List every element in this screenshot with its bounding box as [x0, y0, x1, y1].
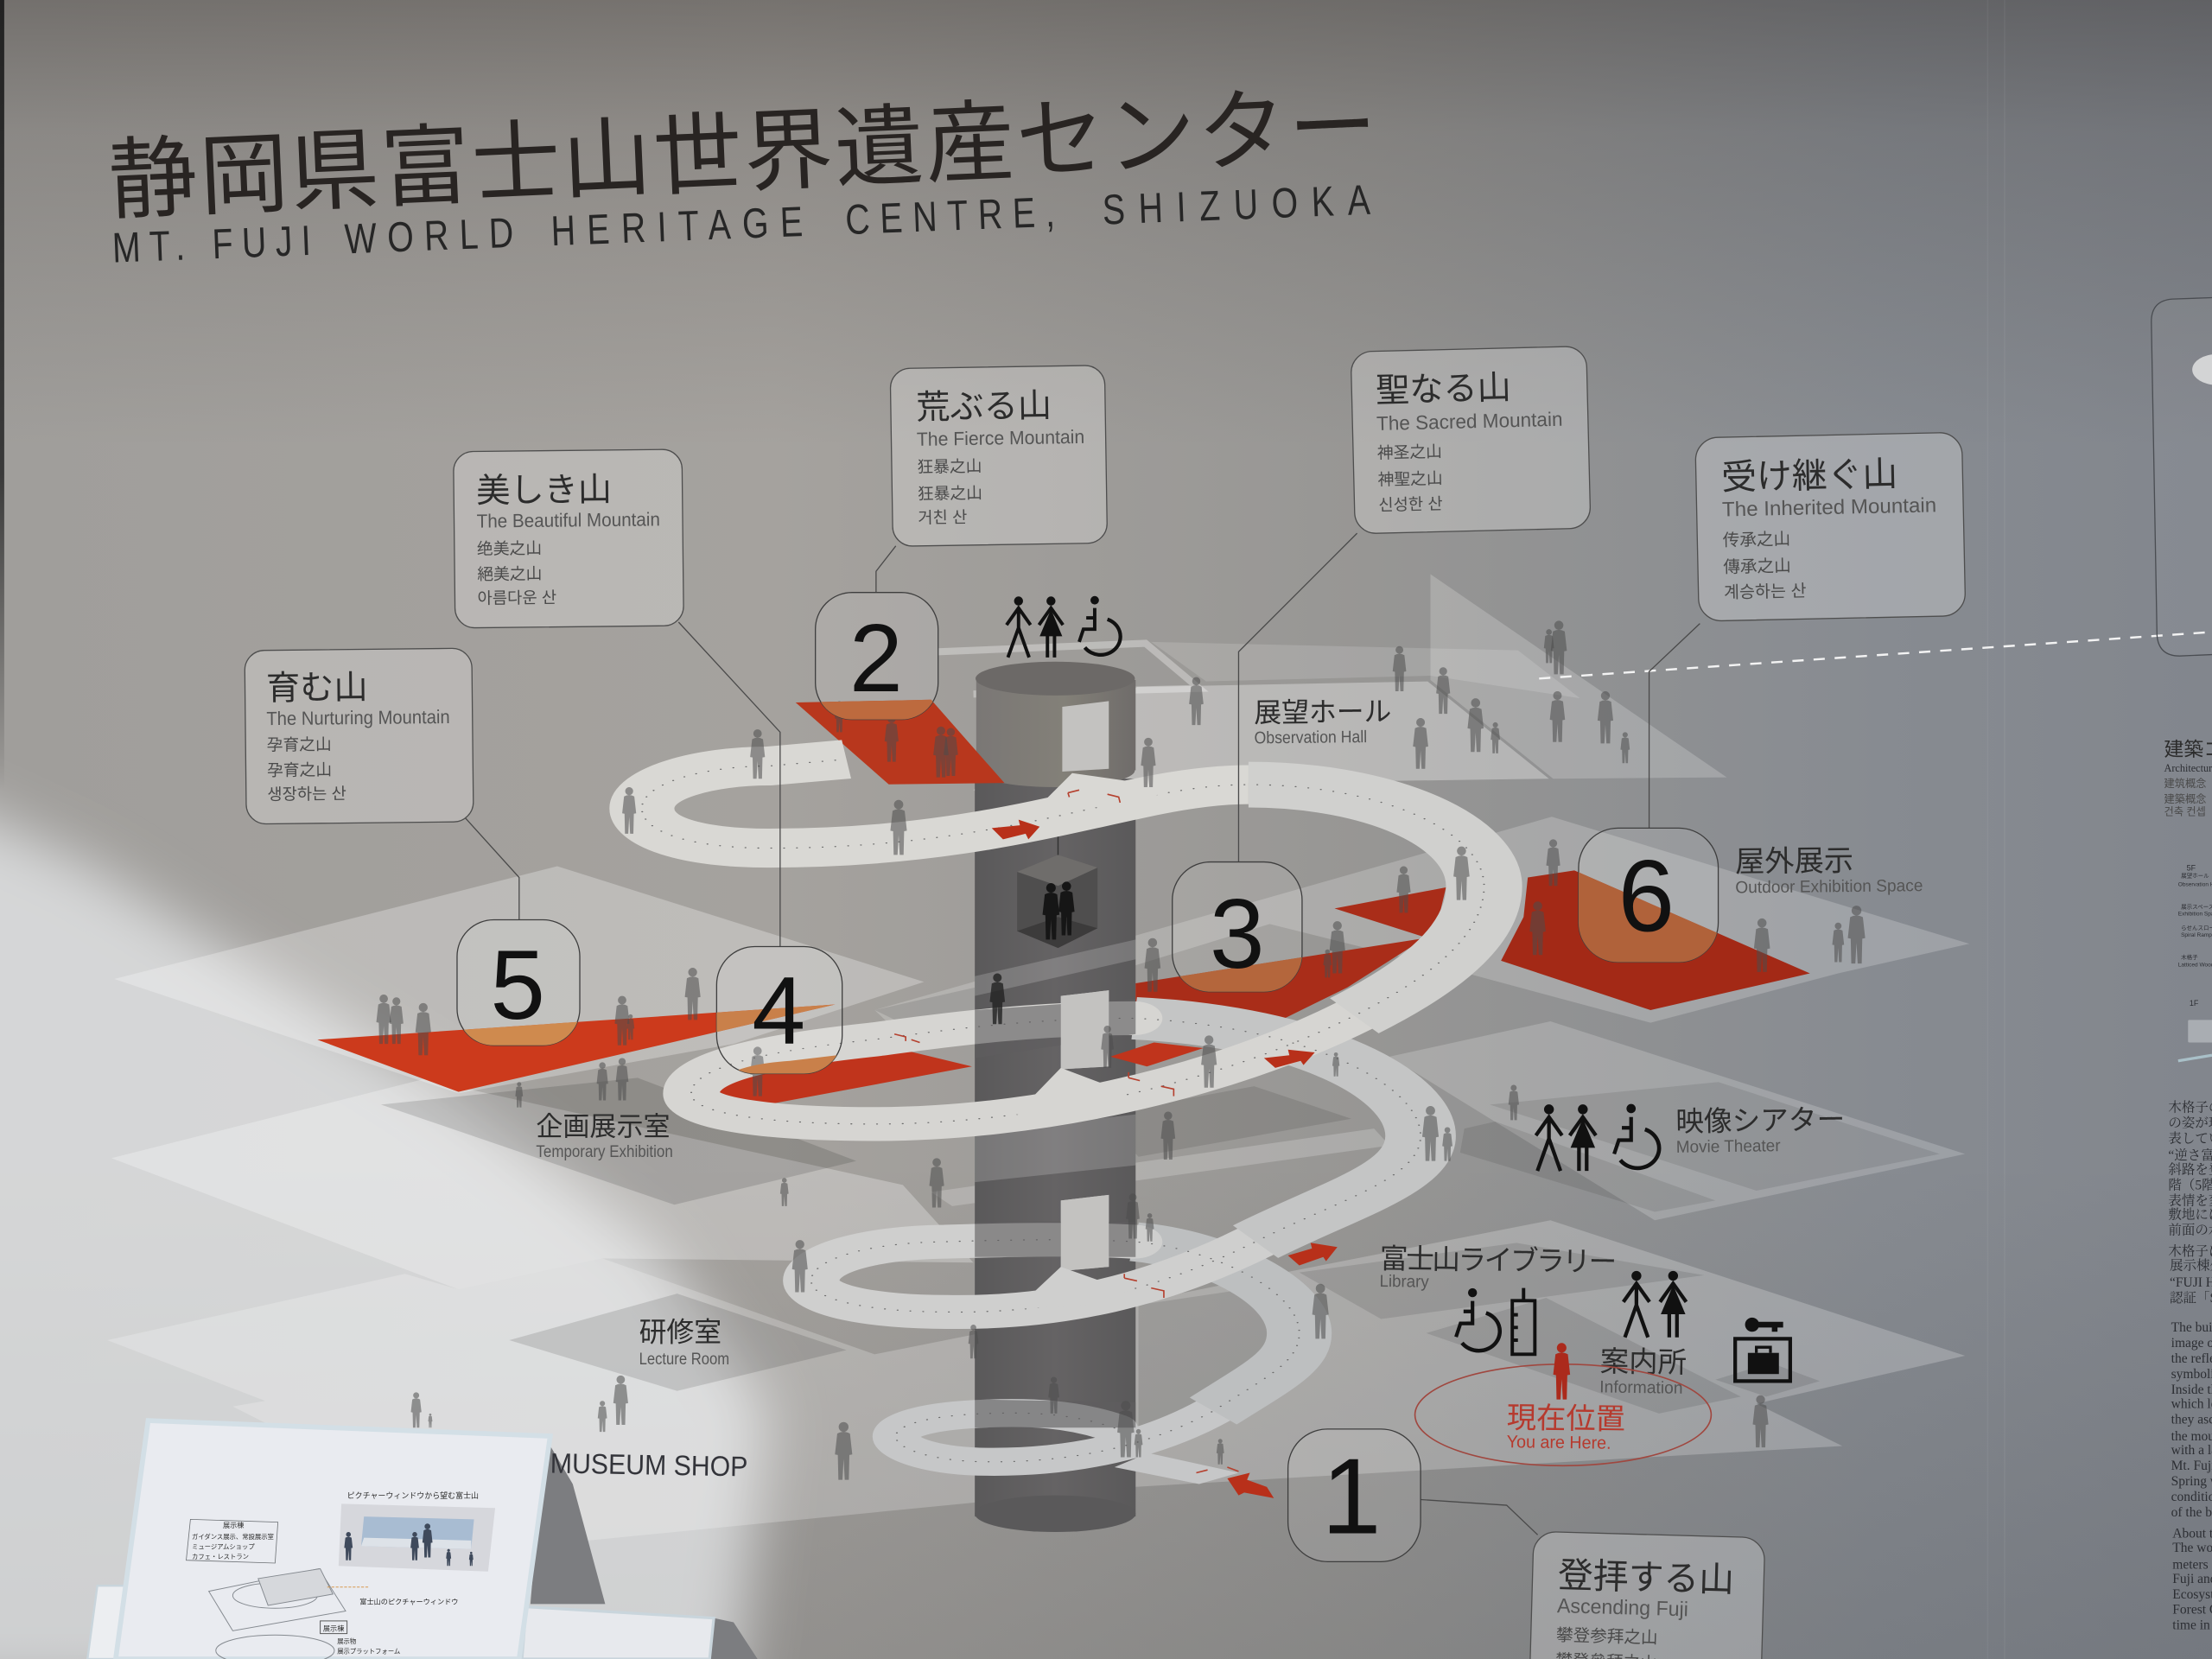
- English title: SHIZUOKA: [1102, 176, 1384, 234]
- arrow 4: [992, 820, 1039, 839]
- ramp passing behind column: [975, 999, 1135, 1427]
- zone 5: [317, 1004, 836, 1092]
- panel: fierce mountain: 狂暴之山: [917, 457, 982, 476]
- zone 3 small: [1110, 1043, 1204, 1066]
- icons: upper restrooms: [1007, 596, 1121, 658]
- poster sub legend: [321, 1621, 400, 1655]
- label: temporary exhibition: [536, 1111, 673, 1161]
- panel: beautiful mountain: The Beautiful Mountain: [477, 508, 660, 532]
- label: observation hall: Observation Hall: [1254, 728, 1367, 747]
- direction arrows: [992, 820, 1338, 1498]
- mini floor labels: 木格子: [2181, 953, 2198, 961]
- panel: nurturing mountain: [245, 648, 474, 824]
- outdoor floor: [874, 817, 1969, 1037]
- body text column: [2168, 1100, 2212, 1633]
- floor shadow patches: [874, 988, 1351, 1446]
- arrow 2: [1288, 1243, 1338, 1265]
- poster legend: [187, 1519, 278, 1563]
- spiral ramp: [642, 760, 1484, 1462]
- panel: inherited mountain: [1695, 432, 1966, 621]
- doors: [1061, 701, 1109, 1271]
- temporary exhibition inset: [381, 1077, 856, 1205]
- poster shadow: [531, 1436, 758, 1659]
- label: library: [1379, 1243, 1617, 1294]
- poster legend: カフェ・レストラン: [192, 1553, 249, 1560]
- arrow 3: [1264, 1050, 1315, 1068]
- panel: right edge section: [2152, 297, 2212, 656]
- panel: inherited mountain: 受け継ぐ山: [1721, 454, 1898, 498]
- label: movie theater: 映像シアター: [1675, 1103, 1845, 1137]
- label: outdoor exhibition: Outdoor Exhibition Space: [1735, 876, 1923, 897]
- column highlights: [975, 939, 1135, 1182]
- icons: theater restrooms: [1536, 1104, 1659, 1171]
- number marker 1: [1288, 1429, 1421, 1561]
- ramp level 3: [691, 785, 1484, 1124]
- icons: library restrooms: [1456, 1271, 1686, 1354]
- elevator: [1017, 825, 1097, 948]
- poster legend: 展示棟: [223, 1521, 244, 1529]
- upper cylinder: [976, 680, 1135, 770]
- number marker 3: [1172, 861, 1303, 992]
- Japanese title: 静岡県富士山世界遺産センター: [106, 76, 1379, 231]
- poster photo: [339, 1503, 495, 1572]
- panel: fierce mountain: 荒ぶる山: [916, 387, 1052, 427]
- ground floor: [107, 1220, 1965, 1546]
- lower floor strip: [931, 1128, 1389, 1206]
- mini floor labels: [2178, 863, 2212, 1007]
- poster sub legend: 展示プラットフォーム: [337, 1647, 400, 1655]
- zone 3: [1135, 938, 1425, 1030]
- text: architecture concept: 建築概念: [2164, 792, 2206, 805]
- panel: ascending fuji: [1529, 1531, 1765, 1659]
- label: lecture room: 研修室: [639, 1317, 721, 1348]
- label: observation hall: [1254, 696, 1392, 747]
- mini floor labels: 1F: [2190, 999, 2199, 1007]
- visitor silhouettes: [377, 620, 1866, 1480]
- panel: inherited mountain: 傳承之山: [1723, 556, 1791, 577]
- label: library: Library: [1379, 1272, 1429, 1292]
- mini floor labels: 展望ホール: [2181, 873, 2209, 880]
- poster legend: ミュージアムショップ: [192, 1543, 255, 1551]
- panel: inherited mountain: 계승하는 산: [1724, 582, 1807, 602]
- floor labels: [536, 696, 1923, 1398]
- observation floor: [974, 682, 1549, 832]
- number marker 1: 1: [1322, 1438, 1382, 1557]
- panel: beautiful mountain: 美しき山: [476, 472, 612, 510]
- label: library: 富士山ライブラリー: [1380, 1243, 1617, 1278]
- panel: fierce mountain: 거친 산: [918, 508, 967, 527]
- number marker 6: 6: [1618, 840, 1675, 953]
- mini diagram card: [2178, 1020, 2212, 1061]
- ramp platforms: [1016, 773, 1238, 1484]
- panel: fierce mountain: The Fierce Mountain: [917, 426, 1084, 450]
- dashed sight line: [1539, 632, 2212, 678]
- leader lines: [466, 533, 1700, 1535]
- panel: sacred mountain: 神聖之山: [1377, 469, 1443, 489]
- glass triangle: [1431, 574, 1726, 779]
- English title: HERITAGE: [550, 198, 816, 255]
- route markers: [894, 790, 1238, 1472]
- panel: nurturing mountain: The Nurturing Mountain: [266, 706, 450, 729]
- text: architecture concept: [2164, 738, 2212, 818]
- sunlight patch: [0, 785, 767, 1659]
- text: architecture concept: 建筑概念: [2164, 777, 2206, 790]
- panel: ascending fuji: 攀登参拜之山: [1556, 1626, 1658, 1648]
- zone 2: [796, 700, 1004, 785]
- panel: beautiful mountain: 아름다운 산: [477, 588, 556, 607]
- arrow 1: [1227, 1472, 1274, 1498]
- number marker 2: 2: [849, 604, 903, 712]
- restroom frame: [938, 643, 1199, 694]
- number marker 6: [1578, 828, 1719, 963]
- column body: [975, 779, 1135, 1516]
- panel: beautiful mountain: 絕美之山: [477, 564, 542, 583]
- label: movie theater: Movie Theater: [1676, 1136, 1781, 1157]
- label: outdoor exhibition: 屋外展示: [1735, 845, 1853, 879]
- text: architecture concept: 건축 컨셉: [2164, 806, 2206, 818]
- zone 6: [1501, 870, 1810, 1010]
- poster legend: ガイダンス展示、常設展示室: [192, 1533, 274, 1541]
- label: lecture room: Lecture Room: [639, 1350, 729, 1369]
- panel: ascending fuji: 登拝する山: [1557, 1555, 1735, 1599]
- panel: beautiful mountain: 绝美之山: [477, 539, 542, 558]
- panel: nurturing mountain: 생장하는 산: [267, 785, 346, 804]
- lower door repaint: [1061, 990, 1109, 1271]
- label: information: 案内所: [1599, 1346, 1687, 1379]
- English title: WORLD: [344, 209, 525, 263]
- panel: inherited mountain: 传承之山: [1723, 530, 1790, 550]
- third floor left: [114, 866, 924, 1093]
- observation band: [1151, 642, 1580, 698]
- panel: sacred mountain: 신성한 산: [1378, 494, 1443, 514]
- panel: ascending fuji: Ascending Fuji: [1557, 1595, 1688, 1621]
- title: [106, 76, 1384, 272]
- mini floor labels: Spiral Ramp: [2181, 932, 2212, 938]
- second floor left: [111, 1079, 974, 1289]
- panel: fierce mountain: [890, 365, 1108, 546]
- number marker 5: 5: [490, 931, 545, 1040]
- you are here marker: You are Here.: [1507, 1433, 1611, 1453]
- library insets: [1300, 1243, 1820, 1414]
- label: temporary exhibition: Temporary Exhibition: [536, 1142, 673, 1161]
- number marker 2: [815, 592, 938, 721]
- poster caption: 富士山のピクチャーウィンドウ: [359, 1597, 458, 1605]
- mini floor labels: 5F: [2187, 863, 2196, 872]
- number marker 4: 4: [752, 957, 805, 1065]
- label: temporary exhibition: 企画展示室: [536, 1111, 671, 1141]
- red exhibition zones: [317, 700, 1810, 1103]
- poster heading: ピクチャーウィンドウから望む富士山: [347, 1491, 479, 1500]
- poster sub legend: 展示棟: [323, 1624, 344, 1632]
- panel: nurturing mountain: 孕育之山: [267, 760, 332, 779]
- label: information: Information: [1599, 1377, 1683, 1398]
- panel: sacred mountain: The Sacred Mountain: [1376, 408, 1563, 435]
- label: museum shop: MUSEUM SHOP: [550, 1446, 748, 1482]
- number marker 3: 3: [1210, 880, 1265, 989]
- panel: beautiful mountain: [454, 449, 683, 628]
- movie theater insets: [1460, 1082, 1940, 1211]
- panel: nurturing mountain: 育む山: [266, 670, 368, 708]
- poster sub legend: 展示物: [337, 1637, 356, 1645]
- label: lecture room: [639, 1317, 729, 1369]
- panel: sacred mountain: 聖なる山: [1376, 370, 1511, 410]
- ramp level 2: [811, 1018, 1421, 1312]
- panel: sacred mountain: [1351, 346, 1591, 534]
- floor plans: [107, 574, 1969, 1546]
- panel: nurturing mountain: 孕育之山: [267, 735, 332, 754]
- you are here marker: [1415, 1343, 1711, 1465]
- number marker 4: [715, 945, 843, 1075]
- label: information: [1599, 1346, 1687, 1398]
- movie theater floor: [1389, 1021, 1965, 1220]
- ramp guide dots: [642, 760, 1484, 1462]
- English title: CENTRE,: [844, 188, 1065, 244]
- second poster: [522, 1607, 714, 1659]
- main poster: [116, 1421, 550, 1659]
- English title: MT. FUJI: [111, 217, 321, 272]
- icon: coin locker: [1735, 1318, 1790, 1381]
- label: observation hall: 展望ホール: [1254, 696, 1392, 728]
- central column: [975, 662, 1135, 1532]
- label: outdoor exhibition: [1735, 844, 1923, 897]
- panel: sacred mountain: 神圣之山: [1377, 442, 1442, 462]
- ramp level 1: [896, 1242, 1300, 1462]
- zone 4: [716, 1048, 972, 1103]
- label: movie theater: [1675, 1103, 1846, 1157]
- you are here marker: 現在位置: [1507, 1402, 1625, 1436]
- panel: fierce mountain: 狂暴之山: [918, 484, 982, 503]
- ramp level 4: [642, 760, 1249, 849]
- poster building sketch: [209, 1569, 370, 1659]
- lecture room: [509, 1294, 847, 1391]
- panel: inherited mountain: The Inherited Mountain: [1722, 494, 1936, 522]
- small poster left: [87, 1586, 125, 1659]
- number marker 5: [456, 919, 581, 1046]
